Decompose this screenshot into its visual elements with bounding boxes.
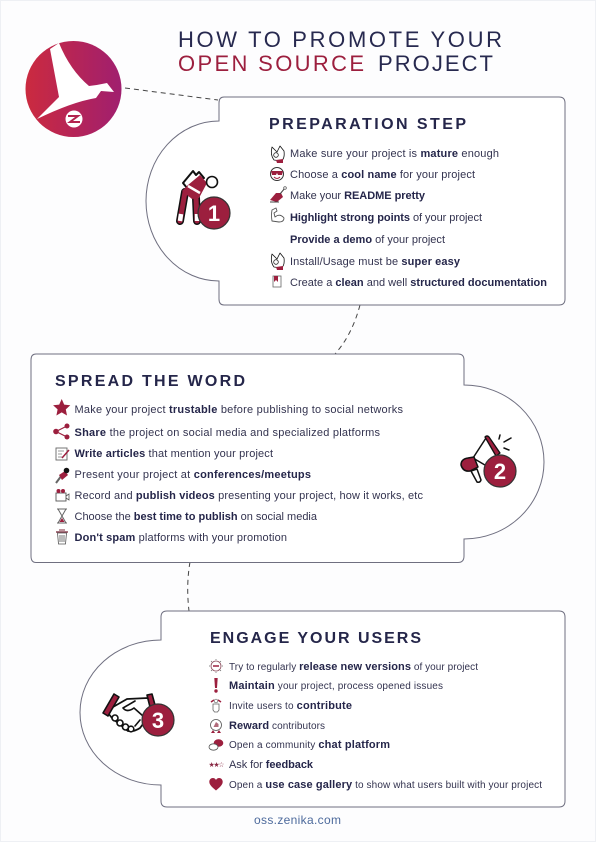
text: strong points: Highlight strong points of your project <box>290 212 482 224</box>
icon: microphone <box>56 468 69 483</box>
text: contribute: Invite users to contribute <box>229 700 352 712</box>
icon: heart <box>209 778 223 790</box>
text: trustable: Make your project trustable before publishing to social networks <box>74 404 404 416</box>
heading: spread the word: SPREAD THE WORD <box>55 373 245 390</box>
text: mature: Make sure your project is mature enough <box>290 148 499 160</box>
text: documentation: Create a clean and well structured documentation <box>290 277 547 289</box>
connector: step 2 to step 3 <box>188 562 190 611</box>
panel: preparation step <box>146 97 565 305</box>
connector: logo to step 1 <box>125 88 218 100</box>
icon: handshake with number 3 <box>103 694 174 736</box>
title: PROJECT <box>378 51 493 76</box>
text: spam: Don't spam platforms with your promotion <box>74 532 287 544</box>
text: chat platform: Open a community chat platform <box>229 739 390 751</box>
text: reward: Reward contributors <box>229 720 325 732</box>
icon: ok hand <box>271 146 284 163</box>
icon: trash can <box>56 530 68 544</box>
icon: stretching person with number 1: 1 <box>208 201 220 226</box>
icon: reward medal <box>210 720 222 733</box>
heading: engage your users: ENGAGE YOUR USERS <box>210 630 421 647</box>
text: videos: Record and publish videos presenting your project, how it works, etc <box>74 490 424 502</box>
icon: stretching person with number 1 <box>180 171 230 229</box>
icon: emoji with sunglasses <box>270 168 284 180</box>
icon: article <box>56 448 69 460</box>
icon: ok hand <box>271 253 284 270</box>
icon: exclamation mark <box>214 678 218 693</box>
text: best time: Choose the best time to publish on social media <box>74 511 318 523</box>
text: articles: Write articles that mention your project <box>74 448 273 460</box>
title: HOW TO PROMOTE YOUR <box>178 27 502 52</box>
footer url: oss.zenika.com <box>254 813 341 827</box>
icon: handshake with number 3: 3 <box>152 708 164 733</box>
logo: Zenika bird <box>26 41 122 137</box>
text: super easy: Install/Usage must be super easy <box>290 256 461 268</box>
panel: spread the word <box>31 354 544 562</box>
text: use case gallery: Open a use case gallery to show what users built with your project <box>229 779 542 791</box>
icon: share <box>53 424 70 440</box>
text: cool name: Choose a cool name for your project <box>290 169 475 181</box>
panel: engage your users <box>80 611 565 807</box>
icon: release badge <box>209 659 223 673</box>
icon: document <box>273 276 281 287</box>
icon: megaphone with number 2 <box>461 435 516 487</box>
icon: invite users <box>211 699 221 712</box>
text: conferences: Present your project at conferences/meetups <box>74 469 311 481</box>
text: release: Try to regularly release new versions of your project <box>229 661 478 673</box>
connector: step 1 to step 2 <box>335 305 360 354</box>
icon: video camera <box>56 489 69 501</box>
text: readme: Make your README pretty <box>290 190 426 202</box>
icon: paint brush <box>270 187 286 202</box>
heading: preparation step: PREPARATION STEP <box>269 116 466 133</box>
icon: hourglass <box>57 509 67 523</box>
icon: chat bubbles <box>209 739 223 750</box>
icon: megaphone with number 2: 2 <box>494 459 506 484</box>
text: feedback: Ask for feedback <box>229 759 314 771</box>
title: OPEN SOURCE <box>178 51 364 76</box>
icon: biceps <box>272 208 284 222</box>
text: share: Share the project on social media and specialized platforms <box>74 427 380 439</box>
title <box>178 27 502 76</box>
icon: rating stars: ★★☆ <box>208 761 224 769</box>
text: demo: Provide a demo of your project <box>290 234 445 246</box>
text: maintain: Maintain your project, process opened issues <box>229 680 443 692</box>
icon: star <box>53 399 70 416</box>
